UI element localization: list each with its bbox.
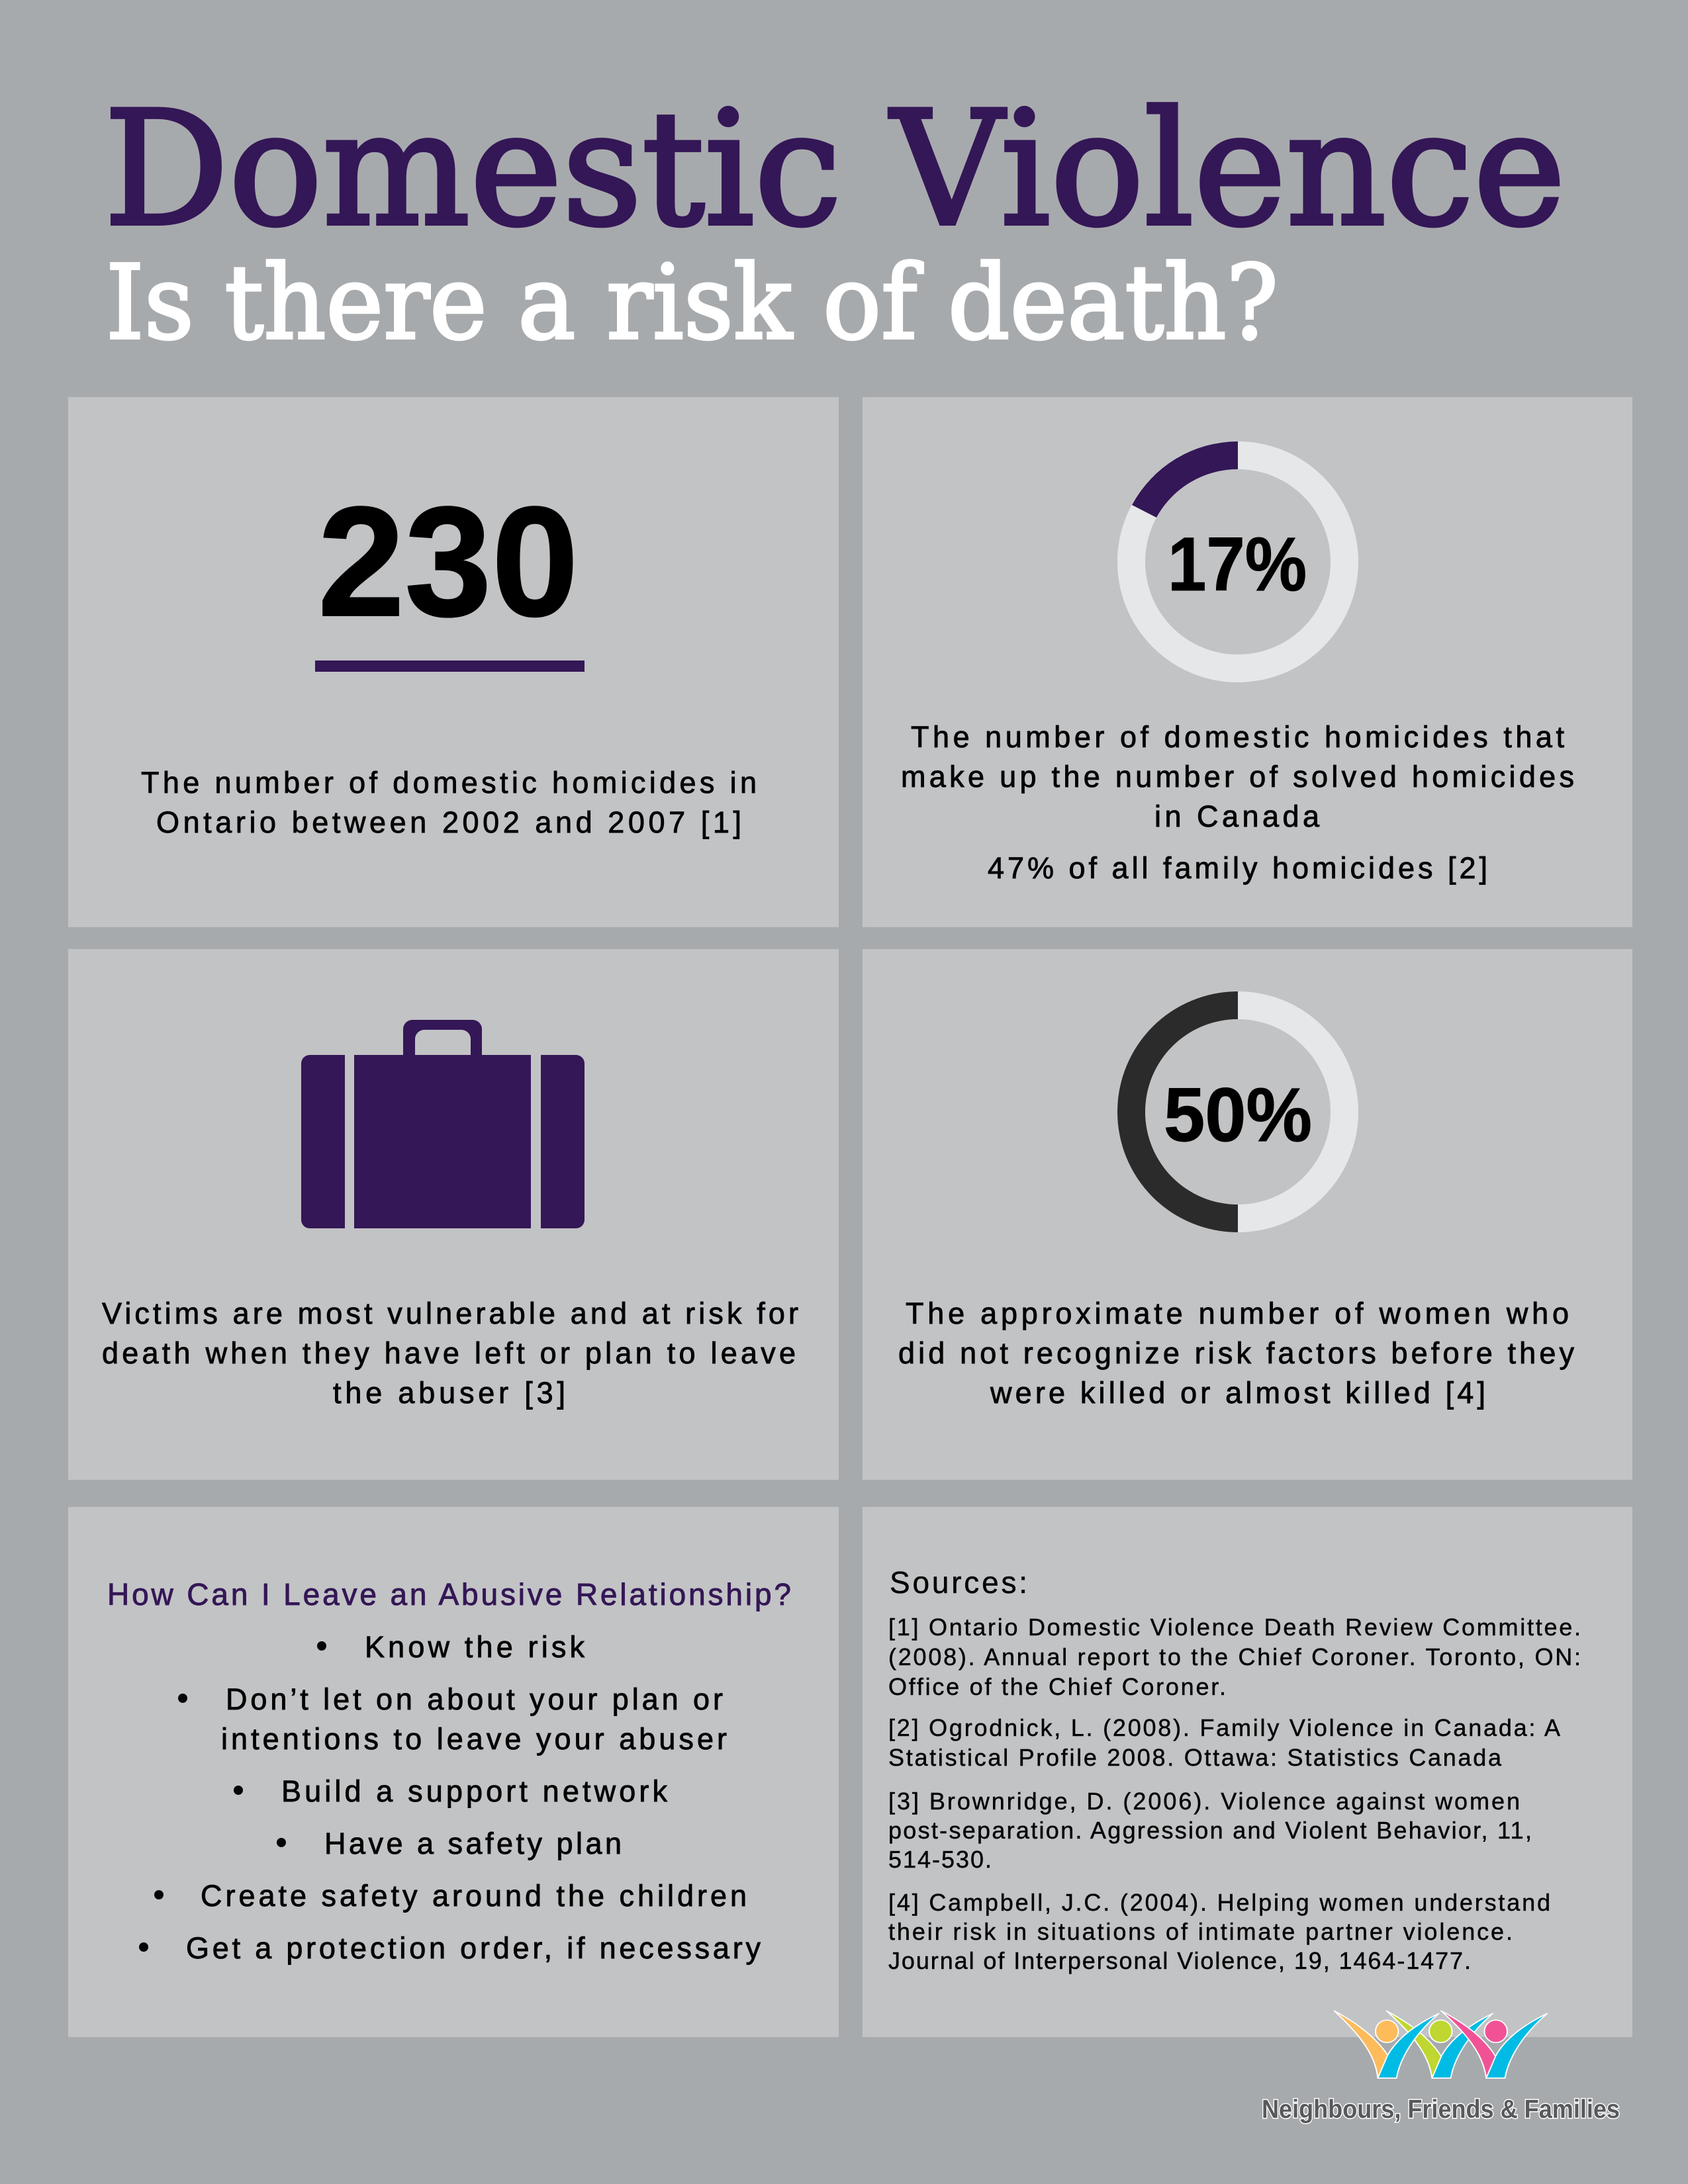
text: solved homicides: make up the number of solved homicides <box>901 760 1574 794</box>
source 4: Journal of Interpersonal Violence, 19, 1464-1477. <box>888 1947 1471 1974</box>
stat: 230: 230 <box>318 475 579 649</box>
text: solved homicides: in Canada <box>1154 799 1320 833</box>
text: victims at risk <box>102 1297 798 1410</box>
donut chart: 17% <box>1131 441 1344 668</box>
source 3 <box>888 1788 1532 1873</box>
text: solved homicides: The number of domestic homicides that <box>911 720 1564 754</box>
text: risk factors: were killed or almost killed [4] <box>990 1376 1485 1410</box>
title: Domestic Violence <box>104 78 1566 261</box>
source 1: [1] Ontario Domestic Violence Death Review Committee. <box>888 1614 1581 1641</box>
source 3: post-separation. Aggression and Violent Behavior, 11, <box>888 1817 1532 1844</box>
panel: 50 percent <box>863 949 1632 1480</box>
source 2: [2] Ogrodnick, L. (2008). Family Violence in Canada: A <box>888 1714 1560 1741</box>
text: risk factors <box>898 1297 1574 1410</box>
list: safety steps: Create safety around the children <box>201 1879 747 1913</box>
source 1 <box>888 1614 1581 1700</box>
source 3: [3] Brownridge, D. (2006). Violence against women <box>888 1788 1520 1815</box>
panel: 230 homicides <box>68 397 839 927</box>
source 4: [4] Campbell, J.C. (2004). Helping women understand <box>888 1889 1550 1916</box>
text: homicides in Ontario: Ontario between 2002 and 2007 [1] <box>156 805 741 839</box>
text: victims at risk: Victims are most vulnerable and at risk for <box>102 1297 798 1330</box>
panel: sources <box>863 1507 1632 2037</box>
source 3: 514-530. <box>888 1846 992 1873</box>
logo: Neighbours, Friends and Families <box>1262 2011 1620 2124</box>
panel: how to leave <box>68 1507 839 2037</box>
panel: 17 percent <box>863 397 1632 927</box>
logo text: Neighbours, Friends & Families <box>1262 2095 1620 2124</box>
source 2 <box>888 1714 1560 1771</box>
donut chart: 17%: 17% <box>1168 522 1307 607</box>
list: safety steps: Get a protection order, if necessary <box>186 1931 761 1965</box>
source 4 <box>888 1889 1550 1974</box>
list: safety steps: Don’t let on about your plan or <box>226 1682 723 1716</box>
donut chart: 50% <box>1117 991 1344 1232</box>
panel: suitcase <box>68 949 839 1480</box>
source 4: their risk in situations of intimate partner violence. <box>888 1918 1513 1945</box>
heading: how can I leave: How Can I Leave an Abusive Relationship? <box>107 1577 791 1612</box>
source 1: (2008). Annual report to the Chief Coroner. Toronto, ON: <box>888 1643 1581 1670</box>
text: solved homicides: 47% of all family homicides [2] <box>988 851 1487 885</box>
source 1: Office of the Chief Coroner. <box>888 1673 1226 1700</box>
subtitle: Is there a risk of death? <box>106 243 1278 363</box>
text: victims at risk: the abuser [3] <box>333 1376 565 1410</box>
list: safety steps: intentions to leave your abuser <box>221 1722 727 1756</box>
donut chart: 50%: 50% <box>1164 1073 1312 1158</box>
list: safety steps: Have a safety plan <box>324 1827 622 1860</box>
text: victims at risk: death when they have left or plan to leave <box>102 1336 796 1370</box>
list: safety steps <box>139 1630 761 1965</box>
text: risk factors: The approximate number of women who <box>906 1297 1569 1330</box>
text: solved homicides <box>901 720 1574 885</box>
icon: three figures <box>1335 2011 1547 2078</box>
text: homicides in Ontario <box>141 766 757 839</box>
underline <box>315 660 585 672</box>
text: homicides in Ontario: The number of domestic homicides in <box>141 766 757 799</box>
list: safety steps: Know the risk <box>365 1630 585 1664</box>
icon: suitcase <box>301 1020 585 1228</box>
text: risk factors: did not recognize risk factors before they <box>898 1336 1574 1370</box>
heading: sources: Sources: <box>890 1565 1027 1600</box>
list: safety steps: Build a support network <box>281 1774 667 1808</box>
source 2: Statistical Profile 2008. Ottawa: Statistics Canada <box>888 1744 1502 1771</box>
